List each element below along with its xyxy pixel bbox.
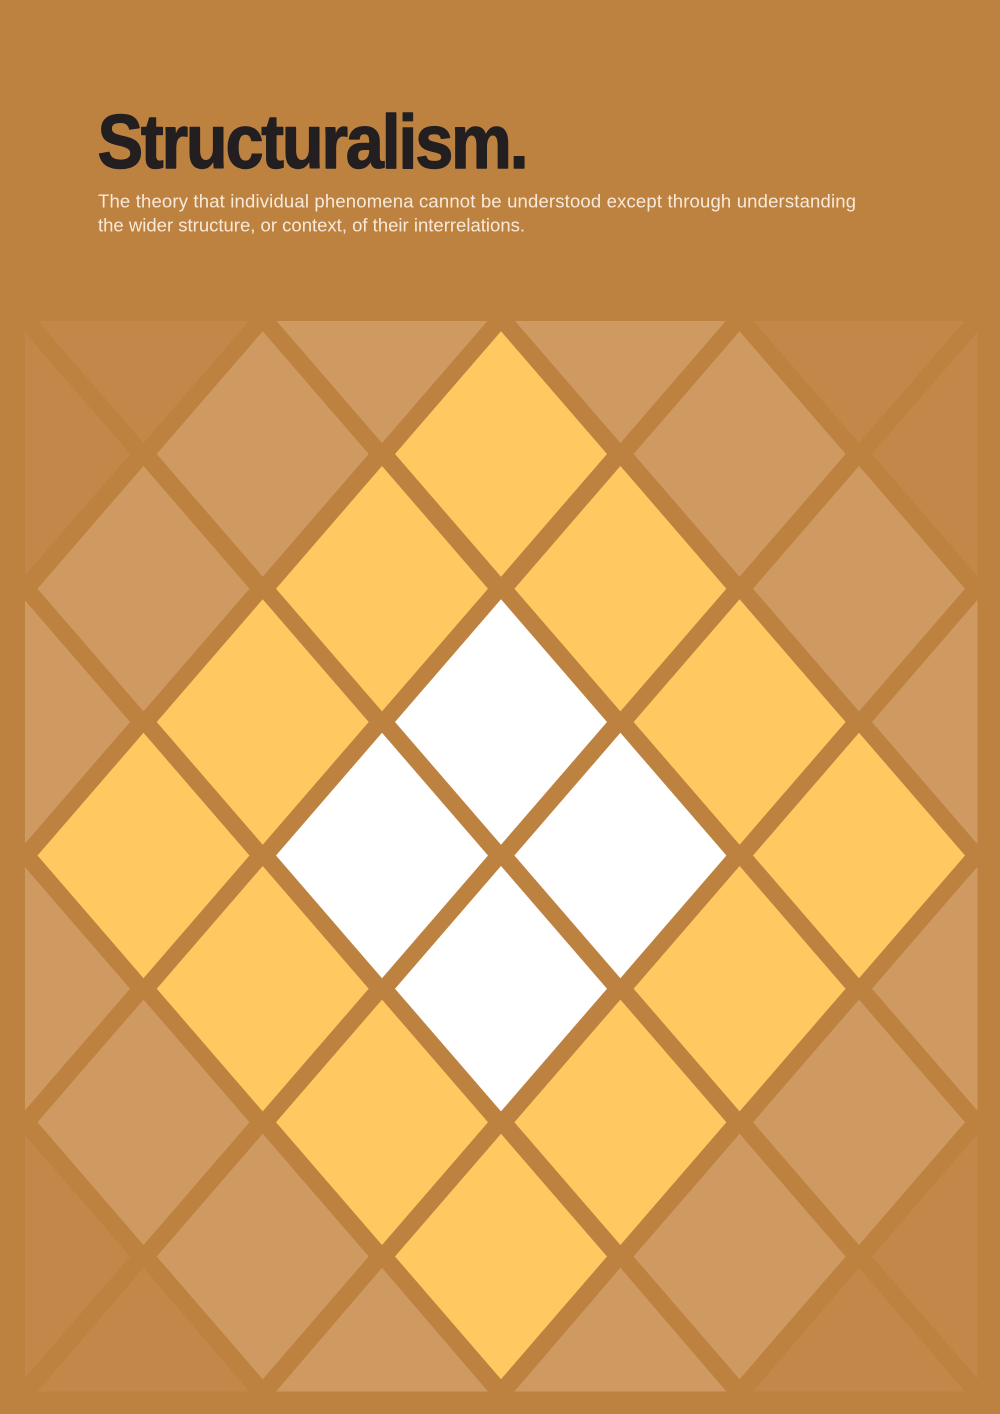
outer edge triangles: darkest tone [25,321,978,1392]
description text: The theory that individual phenomena cannot be understood except through understanding [98,190,856,212]
description text [98,190,856,236]
tan diamonds and edge triangles: middle tone [25,321,978,1392]
yellow diamonds: surrounding ring [38,331,965,1379]
title: Structuralism. [98,101,526,185]
diamond lattice [25,321,978,1392]
white diamonds: central cluster [276,599,726,1111]
description text: the wider structure, or context, of their interrelations. [98,214,525,236]
